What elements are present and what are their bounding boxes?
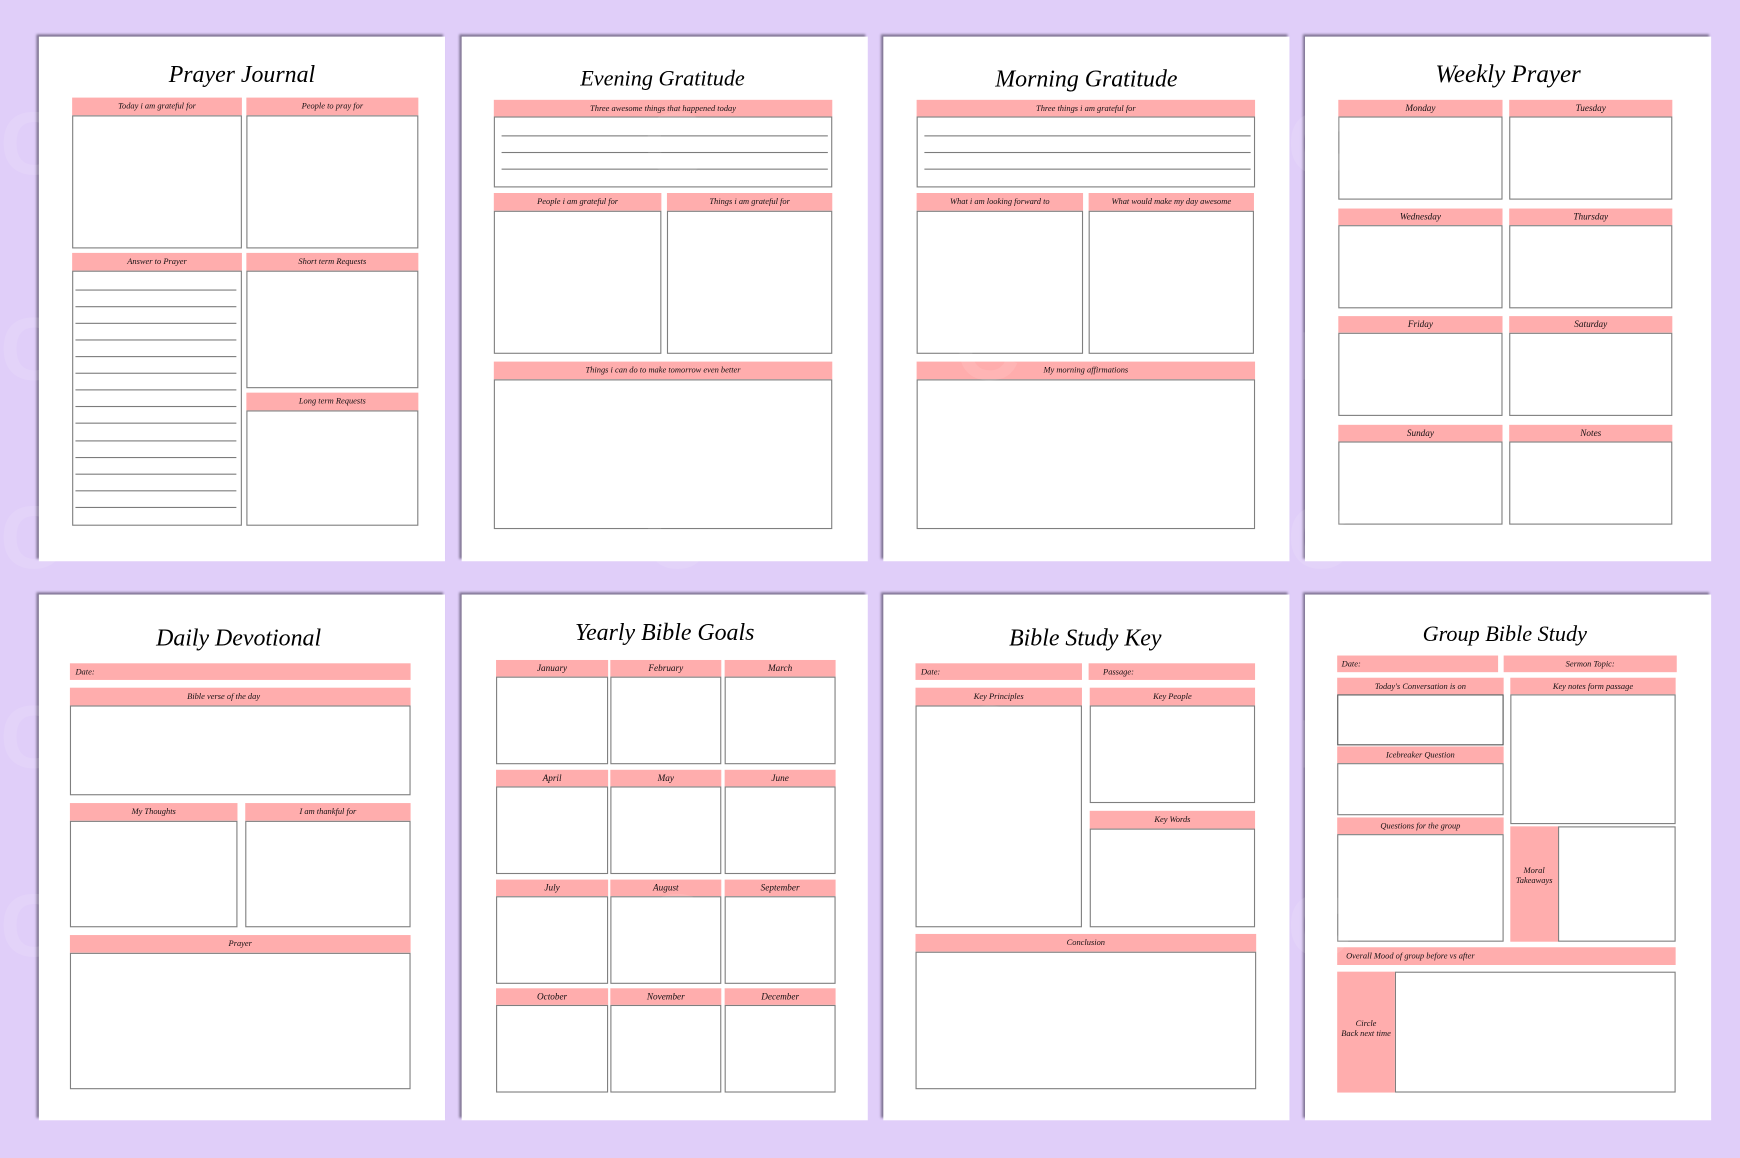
panel: people to pray for bbox=[246, 98, 418, 248]
panel: my morning affirmations bbox=[916, 362, 1256, 530]
panel: thursday bbox=[1509, 208, 1672, 308]
planner page: Group Bible Study bbox=[1305, 595, 1711, 1120]
panel: conclusion bbox=[916, 934, 1256, 1089]
panel: june bbox=[724, 770, 836, 874]
panel: answer to prayer with ruled lines: Answer to Prayer bbox=[127, 256, 187, 266]
panel: july bbox=[496, 880, 608, 984]
panel: three awesome things: Three awesome things that happened today bbox=[590, 103, 736, 113]
panel: things i am grateful for: Things i am grateful for bbox=[709, 196, 790, 206]
panel: sunday bbox=[1338, 424, 1503, 525]
label: circle back next time: Circle bbox=[1356, 1018, 1376, 1028]
label: moral takeaways bbox=[1510, 826, 1558, 942]
panel: people to pray for: People to pray for bbox=[302, 101, 363, 111]
panel: icebreaker question: Icebreaker Question bbox=[1386, 750, 1455, 760]
panel: november: November bbox=[647, 992, 685, 1002]
panel: things to make tomorrow better bbox=[494, 362, 832, 530]
panel: prayer bbox=[70, 935, 411, 1090]
panel: key words: Key Words bbox=[1154, 814, 1190, 824]
panel: bible verse of the day bbox=[70, 688, 411, 796]
panel: august bbox=[610, 880, 722, 984]
date bar: Date: bbox=[75, 667, 95, 677]
panel: january bbox=[496, 660, 608, 764]
label: circle back next time bbox=[1337, 972, 1395, 1093]
title: Group Bible Study bbox=[1423, 622, 1587, 647]
panel: october bbox=[496, 988, 608, 1093]
panel: monday bbox=[1338, 100, 1503, 200]
panel: key words bbox=[1090, 811, 1255, 927]
panel: key principles bbox=[916, 688, 1082, 927]
panel: june: June bbox=[771, 773, 789, 783]
panel: long term requests bbox=[246, 392, 418, 526]
passage bar: Passage: bbox=[1103, 667, 1134, 677]
overall mood bar: Overall Mood of group before vs after bbox=[1346, 951, 1475, 961]
panel: may: May bbox=[658, 773, 674, 783]
title: Weekly Prayer bbox=[1435, 60, 1581, 88]
panel: i am thankful for bbox=[245, 803, 411, 928]
panel: monday: Monday bbox=[1405, 103, 1436, 113]
panel: saturday: Saturday bbox=[1574, 319, 1607, 329]
panel: questions for the group: Questions for the group bbox=[1380, 821, 1460, 831]
panel: april: April bbox=[543, 773, 562, 783]
panel: today i am grateful for bbox=[72, 98, 242, 248]
date bar: Date: bbox=[1342, 659, 1361, 669]
label: moral takeaways: Moral bbox=[1524, 865, 1545, 875]
panel: what would make my day awesome bbox=[1088, 193, 1254, 354]
panel: things i am grateful for bbox=[666, 193, 832, 354]
panel: three things grateful bbox=[916, 100, 1256, 188]
panel: wednesday: Wednesday bbox=[1400, 212, 1441, 222]
panel: saturday bbox=[1509, 316, 1672, 416]
panel: february: February bbox=[648, 663, 683, 673]
panel: three awesome things bbox=[494, 100, 832, 188]
planner page: Weekly Prayer bbox=[1305, 37, 1711, 561]
panel: april bbox=[496, 770, 608, 874]
panel: moral takeaways bbox=[1510, 826, 1676, 942]
panel: i am thankful for: I am thankful for bbox=[299, 806, 356, 816]
panel: september bbox=[724, 880, 836, 984]
panel: answer to prayer with ruled lines bbox=[72, 252, 242, 526]
planner page: Prayer Journal bbox=[39, 37, 445, 561]
panel: july: July bbox=[544, 883, 560, 893]
panel: friday: Friday bbox=[1408, 319, 1433, 329]
panel: looking forward to bbox=[916, 193, 1084, 354]
panel: key principles: Key Principles bbox=[974, 691, 1024, 701]
panel: october: October bbox=[537, 992, 567, 1002]
panel: friday bbox=[1338, 316, 1503, 416]
panel: december: December bbox=[761, 992, 799, 1002]
panel: today's conversation: Today's Conversation is on bbox=[1375, 681, 1466, 691]
panel: questions for the group bbox=[1337, 817, 1504, 942]
panel: people i am grateful for: People i am grateful for bbox=[537, 196, 618, 206]
panel: icebreaker question bbox=[1337, 746, 1504, 815]
planner page: Evening Gratitude bbox=[462, 37, 868, 561]
panel: short term requests: Short term Requests bbox=[298, 256, 366, 266]
panel: notes: Notes bbox=[1580, 428, 1601, 438]
panel: wednesday bbox=[1338, 208, 1503, 308]
title: Bible Study Key bbox=[1009, 624, 1161, 651]
panel: people i am grateful for bbox=[494, 193, 662, 354]
panel: september: September bbox=[761, 883, 800, 893]
panel: my thoughts: My Thoughts bbox=[132, 806, 176, 816]
label: moral takeaways: Takeaways bbox=[1516, 875, 1553, 885]
sermon topic bar: Sermon Topic: bbox=[1566, 659, 1615, 669]
panel: tuesday: Tuesday bbox=[1576, 103, 1606, 113]
panel: thursday: Thursday bbox=[1573, 212, 1608, 222]
panel: today i am grateful for: Today i am grateful for bbox=[118, 101, 196, 111]
panel: march bbox=[724, 660, 836, 764]
panel: things to make tomorrow better: Things i can do to make tomorrow even better bbox=[585, 365, 741, 375]
panel: key people: Key People bbox=[1153, 691, 1192, 701]
planner page: Bible Study Key bbox=[883, 595, 1289, 1120]
title: Yearly Bible Goals bbox=[575, 619, 754, 646]
panel: bible verse of the day: Bible verse of the day bbox=[187, 691, 260, 701]
panel: prayer: Prayer bbox=[229, 938, 252, 948]
planner page: Daily Devotional bbox=[39, 595, 445, 1120]
panel: tuesday bbox=[1509, 100, 1672, 200]
panel: long term requests: Long term Requests bbox=[299, 396, 366, 406]
date bar: Date: bbox=[921, 667, 940, 677]
panel: circle back next time bbox=[1337, 972, 1676, 1093]
title: Evening Gratitude bbox=[580, 67, 745, 91]
title: Morning Gratitude bbox=[995, 65, 1178, 92]
panel: march: March bbox=[768, 663, 792, 673]
panel: key notes from passage: Key notes form passage bbox=[1553, 681, 1633, 691]
title: Prayer Journal bbox=[169, 61, 315, 88]
title: Daily Devotional bbox=[156, 624, 321, 651]
panel: key notes from passage bbox=[1510, 678, 1676, 824]
panel: notes bbox=[1509, 424, 1672, 525]
panel: my morning affirmations: My morning affirmations bbox=[1043, 365, 1128, 375]
panel: three things grateful: Three things i am grateful for bbox=[1036, 103, 1136, 113]
panel: january: January bbox=[537, 663, 567, 673]
panel: looking forward to: What i am looking forward to bbox=[950, 196, 1050, 206]
panel: december bbox=[724, 988, 836, 1093]
planner page: Yearly Bible Goals bbox=[462, 595, 868, 1120]
panel: november bbox=[610, 988, 722, 1093]
planner page: Morning Gratitude bbox=[883, 37, 1289, 561]
panel: august: August bbox=[653, 883, 679, 893]
panel: my thoughts bbox=[70, 803, 238, 928]
panel: may bbox=[610, 770, 722, 874]
panel: conclusion: Conclusion bbox=[1067, 937, 1105, 947]
panel: sunday: Sunday bbox=[1407, 428, 1434, 438]
label: circle back next time: Back next time bbox=[1341, 1028, 1391, 1038]
panel: what would make my day awesome: What would make my day awesome bbox=[1111, 196, 1231, 206]
panel: february bbox=[610, 660, 722, 764]
panel: today's conversation bbox=[1337, 678, 1504, 745]
panel: short term requests bbox=[246, 252, 418, 388]
panel: key people bbox=[1090, 688, 1255, 803]
